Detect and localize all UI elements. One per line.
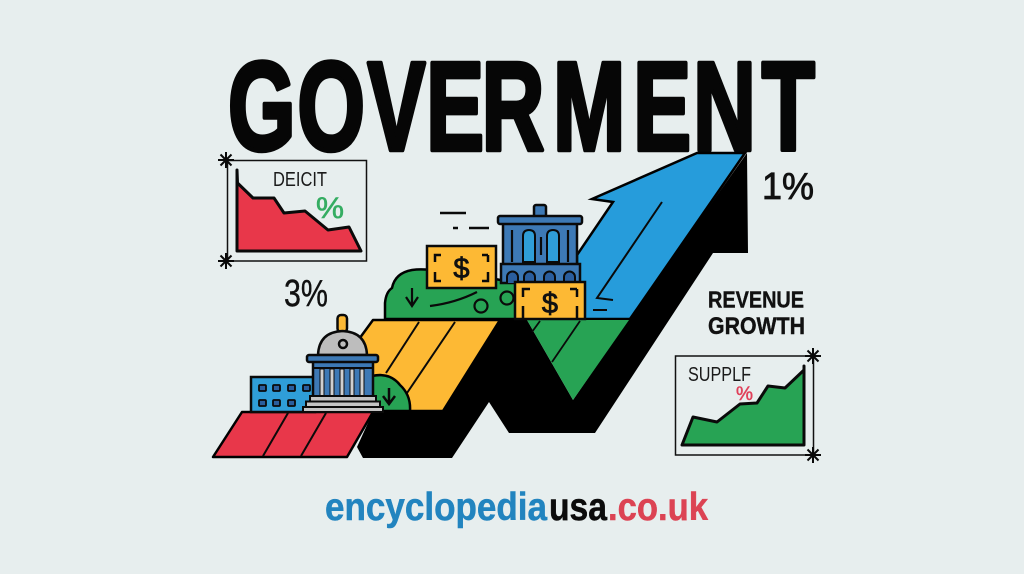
- panel: deficit chart: [218, 152, 366, 269]
- bush: large green: [385, 269, 516, 319]
- star top: [218, 152, 234, 168]
- icon: banknote lower: [515, 282, 585, 320]
- label: 3%: 3%: [284, 273, 328, 315]
- footer url: encyclopedia: [325, 486, 548, 529]
- arrow: black growth base: [357, 153, 748, 458]
- step: yellow segment: [340, 320, 500, 411]
- deficit label: DEICIT: [273, 169, 327, 191]
- green percent: %: [316, 192, 344, 225]
- icon: banknote lower: $: [542, 288, 558, 320]
- icon: small bush: [372, 375, 410, 411]
- footer url: [325, 486, 709, 529]
- panel: supply chart: [676, 348, 821, 463]
- heading: revenue growth: REVENUE: [708, 286, 804, 312]
- heading: revenue growth: GROWTH: [708, 313, 805, 340]
- footer url: usa: [549, 486, 608, 529]
- icon: capitol building: [303, 315, 383, 412]
- star bottom: [218, 253, 234, 269]
- deficit area: [237, 170, 361, 251]
- icon: blue office building: [251, 377, 315, 412]
- icon: banknote upper: $: [453, 253, 470, 285]
- arrow: blue head: [577, 153, 745, 319]
- supply label: SUPPLF: [688, 364, 751, 386]
- star top: [805, 348, 821, 364]
- title: GOVERMENT: [228, 36, 815, 177]
- star bottom: [805, 447, 821, 463]
- icon: banknote upper: [427, 246, 496, 288]
- heading: revenue growth: [708, 286, 805, 340]
- step: green segment: [527, 320, 629, 400]
- motion dashes: [440, 213, 489, 228]
- label: 1%: 1%: [762, 166, 814, 208]
- icon: blue bank building: [498, 205, 582, 283]
- step: red segment: [213, 412, 373, 457]
- supply area: [682, 366, 804, 445]
- arrow highlight line: [593, 202, 662, 310]
- red percent: %: [736, 384, 753, 405]
- footer url: .co.uk: [608, 486, 709, 529]
